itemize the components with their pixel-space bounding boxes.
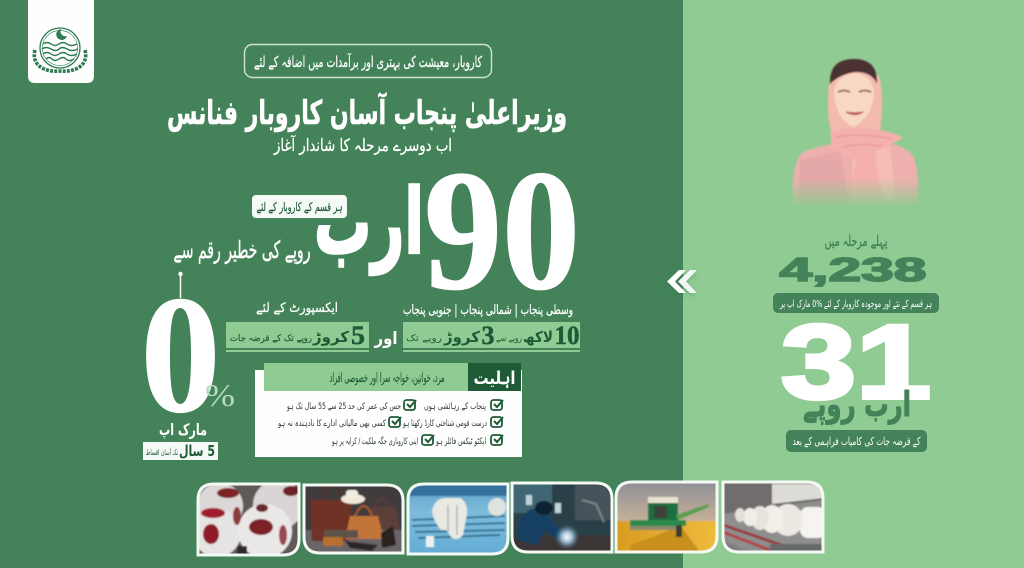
icon: checkmarks xyxy=(389,400,503,445)
loan box: 10 lakh to 3 crore: روپے تک xyxy=(406,334,442,344)
eligibility criteria text xyxy=(277,402,487,447)
logo: Government of Punjab emblem card xyxy=(28,0,94,83)
loan box: 5 crore xyxy=(226,321,369,352)
hair xyxy=(830,59,877,84)
photo: welder xyxy=(512,483,612,552)
label: 5 year easy installments: تک آسان اقساط xyxy=(146,447,178,457)
eligibility criteria text: درست قومی شناختی کارڈ رکھتا ہو xyxy=(402,419,487,429)
pill: after successful loans: کے قرضہ جات کی کامیاب فراہمی کے بعد xyxy=(792,435,921,448)
body xyxy=(792,142,918,205)
pill: zero markup for all businesses xyxy=(773,293,939,313)
loan box: 10 lakh to 3 crore: 10 xyxy=(554,321,580,350)
text: huge amount of rupees: روپے کی خطیر رقم سے xyxy=(174,236,310,264)
pill: zero markup for all businesses: ہر قسم کے نئے اور موجودہ کاروبار کے لئے %0 مارک اپ پر xyxy=(779,299,932,310)
big number 90: 90 xyxy=(424,136,580,326)
eligibility header band xyxy=(264,363,468,391)
text: and: اور xyxy=(374,329,398,349)
label: 5 year easy installments: 5 سال xyxy=(179,442,215,460)
photo: textile yarn machinery xyxy=(723,482,826,552)
top tagline pill: کاروبار، معیشت کی بہتری اور برآمدات میں اضافہ کے لئے xyxy=(254,53,483,71)
title: وزیراعلیٰ پنجاب آسان کاروبار فنانس xyxy=(167,92,567,133)
text: billion rupees: ارب روپے xyxy=(803,385,911,425)
photo: leather goods xyxy=(304,485,403,553)
loan box: 10 lakh to 3 crore: روپے سے xyxy=(496,334,522,344)
eligibility criteria text: پنجاب کے رہائشی ہوں xyxy=(424,402,486,412)
big zero percent: 0 xyxy=(140,262,220,448)
loan box: 10 lakh to 3 crore: 3 xyxy=(482,321,494,350)
eligibility heading: اہلیت xyxy=(474,368,516,389)
portrait: woman in pink scarf xyxy=(785,59,925,208)
icon: double chevron arrow xyxy=(667,270,697,295)
label: for every type of business xyxy=(252,195,347,218)
text: for export: ایکسپورٹ کے لئے xyxy=(256,301,338,316)
eligibility criteria text: جس کی عمر کی حد 25 سے 55 سال تک ہو xyxy=(286,402,401,412)
scarf sides xyxy=(828,66,882,132)
text: markup: مارک اپ xyxy=(159,420,207,440)
photo: combine harvester in wheat xyxy=(616,482,717,552)
photo: surgical instruments xyxy=(408,484,508,554)
big zero percent: % xyxy=(205,377,235,413)
loan box: 5 crore: کروڑ xyxy=(312,328,349,346)
stat: 31: 31 xyxy=(781,304,931,421)
wrapped scarf xyxy=(830,128,903,205)
eligibility criteria text: اپنی کاروباری جگہ ملکیت / کرایہ پر ہو xyxy=(331,435,418,447)
eligibility criteria text: کسی بھی مالیاتی ادارے کا نادہندہ نہ ہو xyxy=(277,419,387,429)
stat: 4,238: 4,238 xyxy=(780,251,926,288)
big word arab: ارب xyxy=(314,170,424,275)
face xyxy=(834,73,874,127)
loan box: 10 lakh to 3 crore: کروڑ xyxy=(443,328,480,346)
icon: emblem circle with waves xyxy=(34,28,86,71)
panel: light green background xyxy=(683,0,1024,568)
loan box: 5 crore: روپے تک کے قرضہ جات xyxy=(230,334,312,344)
text: in first phase: پہلے مرحلہ میں xyxy=(824,232,888,251)
label: 5 year easy installments xyxy=(143,442,218,460)
panel: eligibility xyxy=(255,363,522,457)
pill: after successful loans xyxy=(786,430,927,452)
photo: footballs xyxy=(196,482,300,556)
panel: dark green background xyxy=(0,0,683,568)
label: for every type of business: ہر قسم کے کاروبار کے لئے xyxy=(256,200,342,215)
loan box: 10 lakh to 3 crore xyxy=(403,321,580,352)
subtitle: اب دوسرے مرحلہ کا شاندار آغاز xyxy=(273,134,452,156)
loan box: 5 crore: 5 xyxy=(351,321,365,350)
top tagline pill xyxy=(244,44,492,78)
text: regions: وسطی پنجاب | شمالی پنجاب | جنوبی پنجاب xyxy=(403,303,573,318)
eligibility criteria text: ایکٹو ٹیکس فائلر ہو xyxy=(435,437,486,447)
eligibility header band: مرد، خواتین، خواجہ سرا اور خصوصی افراد xyxy=(330,371,444,386)
loan box: 10 lakh to 3 crore: لاکھ xyxy=(523,328,553,346)
eligibility heading xyxy=(468,363,521,391)
